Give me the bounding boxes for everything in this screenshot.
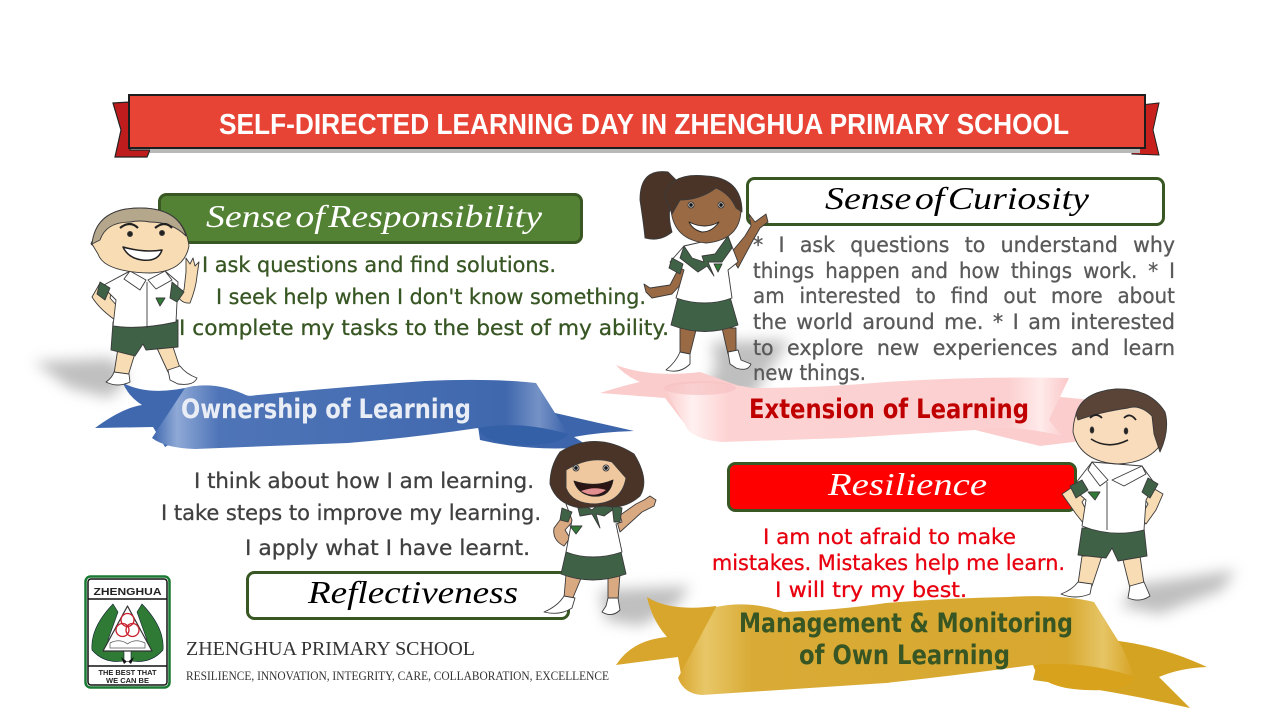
head bbox=[671, 177, 741, 243]
text block: reflectiveness statements: I apply what I have learnt. bbox=[245, 536, 530, 560]
school name and values bbox=[186, 638, 609, 683]
banner shadow bbox=[150, 149, 1140, 153]
icon: school logo bbox=[86, 576, 170, 688]
school name and values: ZHENGHUA PRIMARY SCHOOL bbox=[186, 638, 475, 660]
arms bbox=[644, 262, 692, 298]
ribbon: Management and Monitoring of Own Learning bbox=[616, 596, 1207, 708]
banner body bbox=[129, 95, 1145, 148]
text block: curiosity statements bbox=[753, 233, 1175, 385]
shorts bbox=[1078, 528, 1147, 561]
text block: resilience statements: mistakes. Mistakes help me learn. bbox=[712, 551, 1065, 575]
text block: resilience statements: I am not afraid to make bbox=[763, 525, 1016, 549]
panel: Resilience heading bbox=[728, 464, 1076, 510]
character: girl waving with ponytail bbox=[640, 172, 768, 371]
shirt bbox=[102, 271, 178, 327]
panel: Reflectiveness heading bbox=[248, 572, 568, 618]
text block: reflectiveness statements: I think about how I am learning. bbox=[194, 469, 534, 493]
shirt bbox=[566, 502, 622, 557]
ribbon: Management and Monitoring of Own Learning: of Own Learning bbox=[799, 640, 1010, 671]
text block: reflectiveness statements bbox=[161, 469, 541, 560]
arms bbox=[1062, 482, 1090, 524]
text block: responsibility statements: I complete my tasks to the best of my ability. bbox=[179, 316, 669, 340]
text block: reflectiveness statements: I take steps to improve my learning. bbox=[161, 501, 541, 525]
text block: curiosity statements: am interested to find out more about bbox=[753, 284, 1175, 308]
legs and shoes bbox=[680, 328, 736, 354]
panel: Sense of Curiosity heading: Sense of Curiosity bbox=[825, 180, 1090, 216]
text block: curiosity statements: to explore new experiences and learn bbox=[753, 336, 1175, 360]
character: girl with open mouth bbox=[544, 441, 656, 615]
text block: curiosity statements: * I ask questions to understand why bbox=[753, 233, 1175, 257]
text block: responsibility statements bbox=[179, 253, 669, 340]
title text: SELF-DIRECTED LEARNING DAY IN ZHENGHUA PRIMARY SCHOOL bbox=[219, 109, 1069, 141]
banner left tail bbox=[113, 102, 150, 157]
ponytail bbox=[640, 172, 680, 239]
banner right tail bbox=[1131, 103, 1159, 155]
hair back bbox=[550, 441, 644, 508]
title banner bbox=[113, 95, 1159, 157]
icon: school logo: THE BEST THAT bbox=[98, 668, 157, 677]
head bbox=[1073, 390, 1166, 464]
text block: resilience statements bbox=[712, 525, 1065, 602]
ribbon: Extension of Learning: Extension of Learning bbox=[749, 394, 1029, 425]
shirt bbox=[1072, 462, 1155, 533]
legs and shoes bbox=[564, 574, 620, 600]
text block: responsibility statements: I seek help when I don't know something. bbox=[216, 285, 646, 309]
ribbon: Management and Monitoring of Own Learning: Management & Monitoring bbox=[739, 608, 1073, 639]
arms bbox=[92, 283, 126, 326]
skirt bbox=[561, 552, 626, 580]
text block: resilience statements: I will try my best. bbox=[775, 578, 967, 602]
panel: Resilience heading: Resilience bbox=[827, 466, 987, 502]
school name and values: RESILIENCE, INNOVATION, INTEGRITY, CARE, COLLABORATION, EXCELLENCE bbox=[186, 668, 609, 683]
panel: Sense of Responsibility heading: Sense of Responsibility bbox=[206, 198, 543, 234]
legs and shoes bbox=[114, 348, 136, 376]
text block: responsibility statements: I ask questions and find solutions. bbox=[202, 253, 556, 277]
icon: school logo: ZHENGHUA bbox=[94, 586, 162, 598]
icon: school logo: WE CAN BE bbox=[106, 676, 149, 685]
skirt bbox=[671, 297, 738, 332]
panel: Reflectiveness heading: Reflectiveness bbox=[307, 574, 518, 610]
legs and shoes bbox=[1078, 556, 1144, 588]
text block: curiosity statements: new things. bbox=[753, 361, 866, 385]
ribbon: Ownership of Learning bbox=[95, 380, 634, 449]
shorts bbox=[111, 320, 178, 356]
head bbox=[91, 240, 100, 249]
panel: Sense of Responsibility heading bbox=[160, 194, 582, 242]
text block: curiosity statements: things happen and how things work. * I bbox=[753, 259, 1175, 283]
ribbon: Extension of Learning bbox=[600, 365, 1092, 446]
face bbox=[566, 460, 626, 504]
panel: Sense of Curiosity heading bbox=[748, 178, 1164, 224]
character: boy with peace sign bbox=[91, 208, 199, 385]
text block: curiosity statements: the world around me. * I am interested bbox=[753, 310, 1175, 334]
character: smiling boy hands on hips bbox=[1061, 389, 1167, 600]
ribbon: Ownership of Learning: Ownership of Learning bbox=[181, 394, 471, 425]
shirt bbox=[670, 236, 738, 303]
arms bbox=[616, 496, 656, 532]
character ground shadows bbox=[34, 340, 1236, 626]
